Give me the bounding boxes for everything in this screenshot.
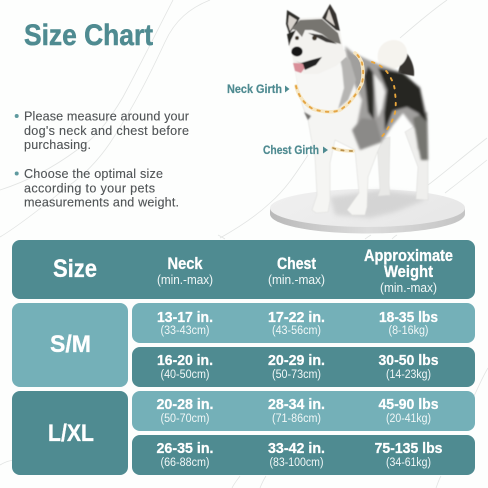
row: S/M small: (43-56cm) (272, 325, 321, 337)
bullet text: choose size advice: Choose the optimal size (24, 167, 163, 181)
row: S/M small: (8-16kg) (388, 325, 429, 337)
bullet text: measure advice (15, 110, 189, 152)
table header: (min.-max) (157, 273, 213, 287)
size cell: S/M (12, 303, 128, 387)
table header: Approximate (364, 247, 453, 265)
row: S/M small (132, 303, 475, 343)
row: L/XL large: 28-34 in. (268, 397, 325, 413)
table header: Neck (168, 254, 203, 273)
row: L/XL large: 20-28 in. (156, 397, 214, 413)
neck ruff (293, 50, 356, 120)
row: S/M small: (33-43cm) (160, 325, 210, 337)
back coat (345, 46, 428, 160)
row: L/XL large: (50-70cm) (160, 413, 210, 425)
bullet text: measure advice: purchasing. (24, 138, 91, 152)
dog illustration (286, 4, 428, 215)
row: L/XL large (132, 391, 475, 431)
row: L/XL large: (20-41kg) (386, 413, 431, 425)
row: S/M small: 18-35 lbs (379, 310, 438, 326)
platform (270, 189, 465, 234)
far rear leg (377, 137, 390, 196)
label: neck girth: Neck Girth (227, 84, 282, 96)
row: L/XL extra large (132, 435, 475, 475)
bullet text: measure advice: Please measure around your (24, 110, 189, 124)
bullet text: choose size advice (15, 167, 179, 210)
title: Size Chart (24, 19, 153, 52)
dog head (286, 4, 346, 74)
chest and front legs (296, 50, 385, 215)
row: L/XL large: (71-86cm) (272, 413, 321, 425)
row: S/M medium: (40-50cm) (160, 369, 210, 381)
row: L/XL extra large: 75-135 lbs (374, 441, 442, 457)
row: L/XL extra large: 33-42 in. (268, 441, 325, 457)
label: chest girth: Chest Girth (263, 145, 319, 157)
neck girth dashed line (296, 53, 363, 112)
row: S/M medium: 30-50 lbs (378, 353, 438, 369)
row: S/M small: 13-17 in. (157, 310, 213, 326)
near rear leg (405, 118, 428, 200)
bullet text: measure advice: dog's neck and chest before (24, 124, 189, 138)
row: S/M medium (132, 347, 475, 387)
row: L/XL large: 45-90 lbs (378, 397, 438, 413)
size cell: L/XL: L/XL (48, 420, 94, 447)
table header: Size (53, 255, 97, 283)
table header: (min.-max) (380, 281, 437, 295)
row: L/XL extra large: (66-88cm) (160, 457, 210, 469)
row: S/M medium: (50-73cm) (272, 369, 321, 381)
table header: Weight (384, 263, 433, 281)
row: S/M small: 17-22 in. (268, 310, 325, 326)
chest girth dashed line (333, 62, 396, 151)
bullet text: choose size advice: according to your pets (24, 182, 155, 196)
row: S/M medium: 20-29 in. (268, 353, 325, 369)
row: S/M medium: (14-23kg) (386, 369, 431, 381)
table header: Chest (277, 254, 316, 273)
size cell: S/M: S/M (50, 331, 91, 358)
row: L/XL extra large: 26-35 in. (156, 441, 214, 457)
table header: (min.-max) (268, 273, 325, 287)
bullet text: choose size advice: measurements and weight. (24, 196, 179, 210)
row: S/M medium: 16-20 in. (157, 353, 213, 369)
row: L/XL extra large: (83-100cm) (270, 457, 324, 469)
size cell: L/XL (12, 391, 128, 475)
table header (12, 240, 475, 299)
dog tail (378, 40, 414, 76)
row: L/XL extra large: (34-61kg) (386, 457, 431, 469)
